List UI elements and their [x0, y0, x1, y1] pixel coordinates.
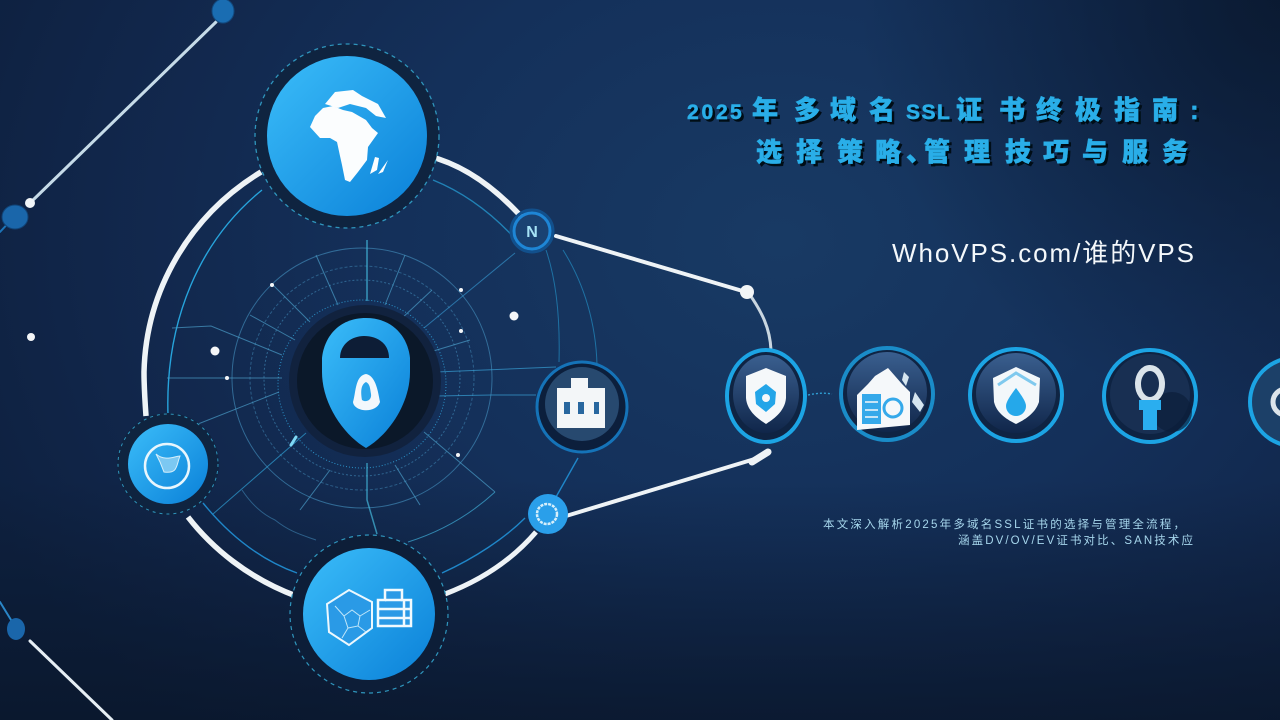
- badge 1: [725, 348, 807, 444]
- center lock shield: [289, 305, 441, 457]
- thick white ring segments: [144, 156, 536, 596]
- description: 涵盖DV/OV/EV证书对比、SAN技术应: [958, 533, 1193, 547]
- node: bottom shield and server: [290, 535, 448, 693]
- icon: shield: [327, 590, 372, 645]
- thin network rings: [232, 248, 495, 542]
- node: left circle: [117, 413, 219, 515]
- badge 3: [968, 347, 1064, 443]
- title: 选择策略、管理技巧与服务: [756, 137, 1188, 167]
- node: building: [537, 362, 627, 452]
- radial spokes: [167, 240, 556, 534]
- node: small N: N: [526, 224, 538, 241]
- site name: WhoVPS.com/谁的VPS: [892, 238, 1194, 268]
- badge row: [725, 346, 1280, 448]
- title: 证书终极指南:: [956, 95, 1199, 125]
- blue arcs: [168, 180, 597, 573]
- network diagram: [0, 0, 832, 720]
- node: small N: [511, 210, 553, 252]
- badge 4: [1102, 348, 1198, 444]
- description: [823, 517, 1193, 547]
- node: small blue: [528, 494, 568, 534]
- title: 2025: [687, 101, 742, 124]
- title: 年多域名: [752, 95, 895, 125]
- description: 本文深入解析2025年多域名SSL证书的选择与管理全流程，: [823, 517, 1185, 531]
- badge 2: [839, 346, 935, 442]
- corner connector lines: [0, 0, 234, 720]
- icon: server: [378, 590, 411, 626]
- icon: Africa map: [310, 90, 388, 182]
- title: [687, 95, 1199, 167]
- badge 5 partial: [1248, 356, 1280, 448]
- scatter dots: [27, 283, 518, 457]
- node: globe: [255, 44, 439, 228]
- connector to badge row: [556, 236, 771, 516]
- title: SSL: [906, 101, 950, 124]
